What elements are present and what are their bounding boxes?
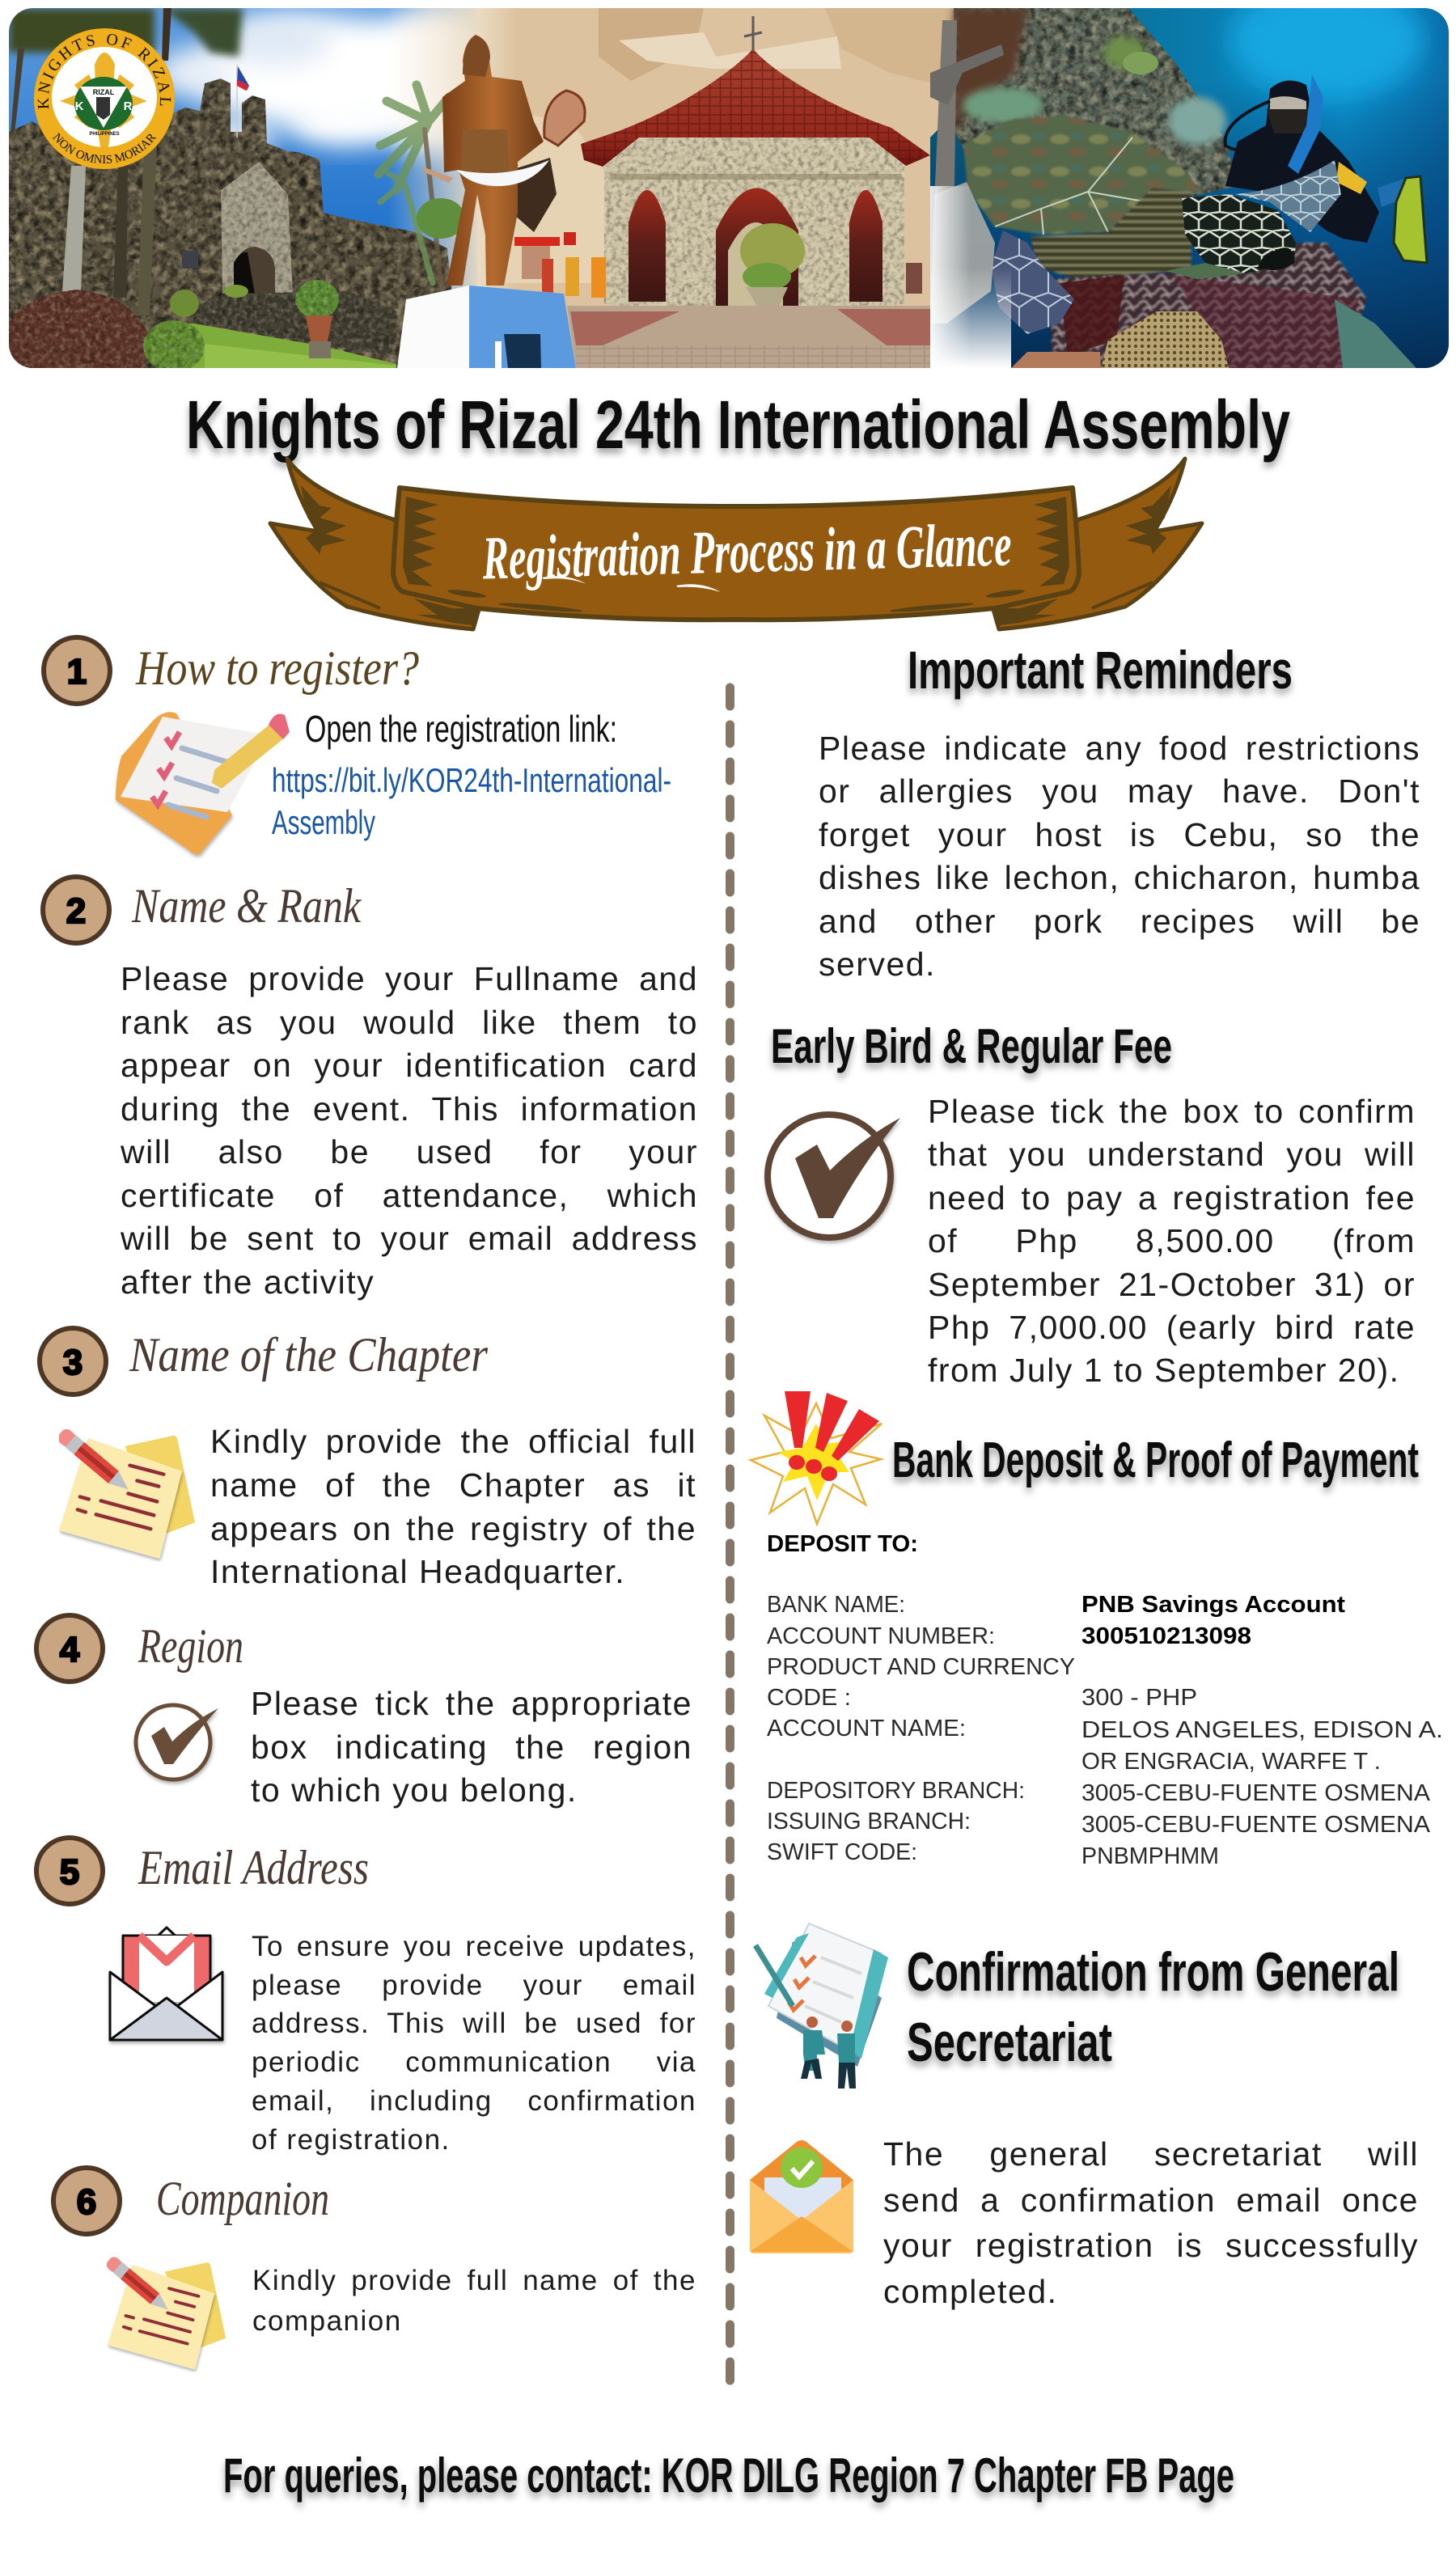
icon: check mark <box>136 1705 218 1779</box>
logo: knights of rizal seal: KNIGHTS OF RIZAL <box>37 34 171 109</box>
fee text: Php 7,000.00 (early bird rate <box>928 1309 1416 1346</box>
step 2 text: certificate of attendance, which <box>121 1176 698 1213</box>
green trees behind wall <box>417 198 465 239</box>
parchment backdrop <box>477 8 963 368</box>
step 2 badge: 2 <box>66 891 86 931</box>
palm near statue <box>379 85 449 283</box>
step 4 text <box>251 1685 692 1809</box>
registration link: Assembly <box>272 803 375 841</box>
icon: checklist clipboard with pencil <box>116 712 290 854</box>
fee text: Please tick the box to confirm <box>928 1093 1416 1130</box>
step 2 text: after the activity <box>121 1263 375 1301</box>
deposit details table: 300 - PHP <box>1081 1685 1197 1711</box>
shrine roof <box>581 16 930 167</box>
white fade at collage seam <box>930 186 1011 368</box>
philippine flag <box>237 65 249 138</box>
step 5 text: please provide your email <box>252 1970 696 2001</box>
registration link: https://bit.ly/KOR24th-International- <box>272 761 671 799</box>
step 4 heading: Region <box>138 1619 243 1673</box>
center dashed divider <box>726 688 734 2385</box>
deposit details table: BANK NAME: <box>767 1592 905 1618</box>
step 2 text: Please provide your Fullname and <box>121 960 698 997</box>
early bird heading: Early Bird & Regular Fee <box>771 1019 1172 1073</box>
deposit details table: PNBMPHMM <box>1081 1843 1219 1869</box>
fort wall <box>9 78 453 368</box>
fee text <box>928 1093 1416 1389</box>
logo: knights of rizal seal: R <box>124 99 133 113</box>
confirmation text: completed. <box>883 2273 1058 2310</box>
step 4 badge <box>36 1615 103 1682</box>
step 6 text: Kindly provide full name of the <box>252 2265 696 2296</box>
step 3 badge <box>40 1328 106 1394</box>
deposit details table: 3005-CEBU-FUENTE OSMENA <box>1081 1812 1431 1838</box>
reminders text: forget your host is Cebu, so the <box>819 816 1420 853</box>
ribbon banner <box>270 459 1202 629</box>
crowd <box>542 257 922 298</box>
ribbon hatching <box>403 497 1069 614</box>
step 5 text: email, including confirmation <box>252 2085 696 2117</box>
step 6 text: companion <box>252 2305 402 2337</box>
step 4 text: Please tick the appropriate <box>251 1685 692 1722</box>
turtle head <box>1165 194 1296 279</box>
fade from sky into parchment <box>392 8 510 290</box>
step 3 text: International Headquarter. <box>210 1553 625 1590</box>
step 5 text: To ensure you receive updates, <box>252 1931 696 1962</box>
step 6 badge: 6 <box>77 2182 96 2222</box>
deposit details table: ACCOUNT NAME: <box>767 1716 966 1741</box>
registration link <box>272 761 671 841</box>
deposit details table: SWIFT CODE: <box>767 1839 917 1865</box>
deposit details table: 300510213098 <box>1081 1623 1251 1649</box>
icon: warning burst with exclamation marks <box>751 1391 882 1524</box>
side building <box>506 113 607 283</box>
gorgonian fan coral <box>1052 243 1367 368</box>
icon: large check mark <box>768 1115 900 1238</box>
turtle neck <box>1031 188 1191 281</box>
deposit details table: ACCOUNT NUMBER: <box>767 1623 995 1649</box>
fee text: of Php 8,500.00 (from <box>928 1222 1416 1259</box>
reminders text <box>819 730 1420 983</box>
step 3 text: Kindly provide the official full <box>210 1423 696 1460</box>
icon: orange envelope with green check <box>750 2140 853 2253</box>
step 2 text: will be sent to your email address <box>121 1220 698 1257</box>
reminders text: Please indicate any food restrictions <box>819 730 1420 767</box>
confirmation text: The general secretariat will <box>883 2135 1419 2173</box>
header photo collage <box>8 0 1449 372</box>
logo: knights of rizal seal: PHILIPPINES <box>89 132 120 137</box>
step 5 text: of registration. <box>252 2124 451 2156</box>
sky behind the fort <box>9 8 477 368</box>
step 2 text: appear on your identification card <box>121 1047 698 1084</box>
reminders text: and other pork recipes will be <box>819 903 1420 940</box>
shrine body <box>604 133 904 307</box>
confirmation heading: Secretariat <box>907 2012 1112 2073</box>
deposit details table <box>767 1531 1443 1869</box>
step 2 heading: Name & Rank <box>131 879 362 933</box>
reminders text: dishes like lechon, chicharon, humba <box>819 859 1420 896</box>
step 3 heading: Name of the Chapter <box>129 1328 489 1382</box>
coral wall colour patches <box>954 8 1226 146</box>
step 1 instruction: Open the registration link: <box>305 708 617 750</box>
confirmation heading <box>907 1941 1399 2073</box>
step 5 text <box>252 1931 696 2156</box>
right ribbon tail <box>993 459 1202 629</box>
step 5 text: periodic communication via <box>252 2046 696 2078</box>
icon: gmail envelope <box>110 1928 222 2040</box>
banner subtitle <box>481 510 1013 592</box>
confirmation text: your registration is successfully <box>883 2227 1419 2264</box>
logo: knights of rizal seal <box>34 28 175 169</box>
confirmation text <box>883 2135 1419 2310</box>
step 5 badge <box>36 1838 103 1904</box>
deposit details table: DEPOSIT TO: <box>767 1531 918 1557</box>
logo: knights of rizal seal: NON OMNIS MORIAR <box>53 133 157 163</box>
icon: sticky note with pencil <box>56 1427 195 1559</box>
step 1 badge: 1 <box>67 652 87 692</box>
deposit details table: CODE : <box>767 1685 851 1711</box>
deposit details table: PNB Savings Account <box>1081 1592 1345 1618</box>
step 3 text: name of the Chapter as it <box>210 1466 696 1504</box>
stone cross and gray statues <box>930 20 1004 324</box>
step 4 badge: 4 <box>60 1630 80 1669</box>
step 5 text: address. This will be used for <box>252 2008 696 2039</box>
step 1 badge <box>44 637 110 704</box>
step 6 heading: Companion <box>156 2172 329 2225</box>
step 5 badge: 5 <box>60 1852 79 1892</box>
diver <box>1225 74 1427 263</box>
deposit details table: DEPOSITORY BRANCH: <box>767 1778 1025 1804</box>
fee text: September 21-October 31) or <box>928 1266 1416 1303</box>
deposit details table: OR ENGRACIA, WARFE T . <box>1081 1749 1381 1775</box>
reminders text: or allergies you may have. Don't <box>819 772 1420 810</box>
icon: sticky note with pencil, small <box>104 2255 226 2370</box>
step 3 text <box>210 1423 696 1590</box>
icon: confirmation checklist with two people <box>756 1923 888 2088</box>
step 2 text: will also be used for your <box>121 1133 698 1170</box>
left ribbon tail <box>270 459 480 629</box>
palm trunks <box>62 146 157 315</box>
banner subtitle: Registration Process in a Glance <box>481 510 1013 592</box>
ocean background <box>930 0 1449 368</box>
step 6 badge <box>53 2168 120 2234</box>
sea slope <box>1335 299 1416 368</box>
turtle front flipper <box>1235 160 1341 232</box>
step 3 badge: 3 <box>63 1343 83 1382</box>
deposit details table: ISSUING BRANCH: <box>767 1809 971 1834</box>
deposit details table: PRODUCT AND CURRENCY <box>767 1654 1075 1680</box>
low stone mound, grass and bushes <box>8 280 396 372</box>
confirmation text: send a confirmation email once <box>883 2181 1419 2219</box>
lapu-lapu statue <box>422 35 557 286</box>
step 4 text: box indicating the region <box>251 1729 692 1766</box>
step 2 text: rank as you would like them to <box>121 1003 698 1040</box>
important reminders heading: Important Reminders <box>908 640 1293 700</box>
coral wall <box>954 8 1238 210</box>
fee text: that you understand you will <box>928 1136 1416 1173</box>
fee text: need to pay a registration fee <box>928 1179 1416 1217</box>
step 2 text: during the event. This information <box>121 1090 698 1128</box>
ribbon centre band <box>393 488 1079 620</box>
fee text: from July 1 to September 20). <box>928 1352 1400 1389</box>
shield behind statue <box>544 91 585 146</box>
step 1 heading: How to register? <box>135 641 419 695</box>
turtle shell <box>963 116 1202 235</box>
step 3 text: appears on the registry of the <box>210 1510 696 1547</box>
step 6 text <box>252 2265 696 2337</box>
fort gate <box>182 162 293 294</box>
brain and pink corals <box>1011 311 1229 368</box>
plaza floor <box>567 306 942 368</box>
shrine plant and urn <box>740 223 805 306</box>
turtle back flipper <box>991 231 1074 334</box>
logo: knights of rizal seal: K <box>75 99 84 113</box>
reminders text: served. <box>819 946 936 983</box>
deposit details table: 3005-CEBU-FUENTE OSMENA <box>1081 1780 1431 1806</box>
step 5 heading: Email Address <box>138 1841 369 1894</box>
logo: knights of rizal seal: RIZAL <box>93 88 115 96</box>
deposit details table: DELOS ANGELES, EDISON A. <box>1081 1717 1443 1743</box>
statue pedestal <box>397 286 576 368</box>
step 4 text: to which you belong. <box>251 1771 578 1809</box>
step 2 badge <box>43 877 109 943</box>
palm fronds at top left <box>9 8 249 131</box>
step 2 text <box>121 960 698 1301</box>
